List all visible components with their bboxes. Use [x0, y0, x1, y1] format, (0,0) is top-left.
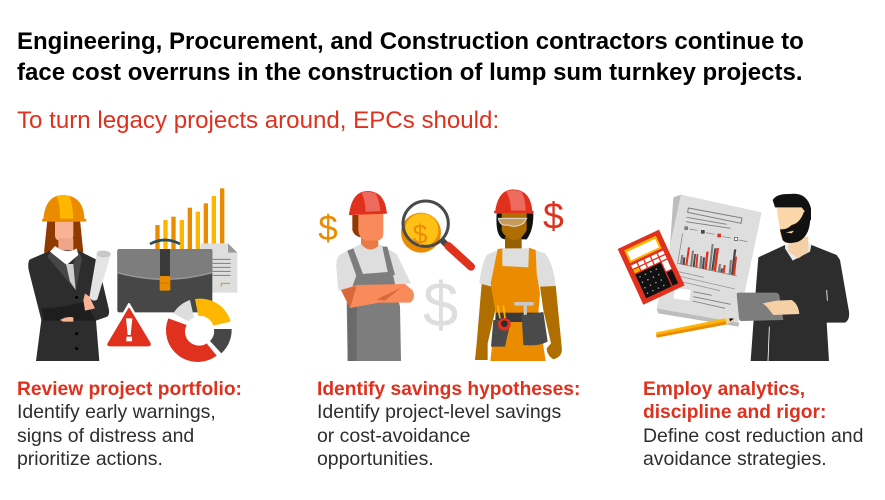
caption: review project portfolio: signs of distress and	[17, 425, 194, 447]
illustration: engineer with briefcase and charts	[28, 188, 238, 362]
caption: identify savings hypotheses: Identify project-level savings	[317, 401, 561, 423]
man with tablet	[737, 194, 849, 361]
worker: man with crossed arms	[336, 191, 414, 361]
icon: warning triangle	[104, 304, 154, 347]
icon: magnifier over coin: $	[413, 219, 428, 249]
calculator	[618, 230, 685, 305]
illustration: workers with coin and dollar signs	[318, 189, 564, 361]
title	[17, 28, 804, 86]
pencil	[656, 318, 737, 338]
caption: review project portfolio: Identify early warnings,	[17, 401, 216, 423]
title: face cost overruns in the construction of lump sum turnkey projects.	[17, 59, 802, 86]
caption: employ analytics: Define cost reduction and	[643, 425, 863, 447]
bar chart	[155, 188, 224, 250]
caption: review project portfolio: prioritize actions.	[17, 448, 163, 470]
caption: identify savings hypotheses: or cost-avoidance	[317, 425, 470, 447]
report document	[657, 195, 762, 327]
caption: employ analytics: discipline and rigor:	[643, 402, 826, 423]
caption: review project portfolio	[17, 379, 242, 470]
document	[201, 243, 237, 293]
briefcase	[117, 240, 212, 312]
bar chart	[678, 233, 737, 276]
title: Engineering, Procurement, and Construction contractors continue to	[17, 28, 804, 55]
caption: employ analytics	[643, 379, 863, 470]
caption: identify savings hypotheses: opportunities.	[317, 448, 434, 470]
caption: identify savings hypotheses	[317, 379, 580, 470]
caption: identify savings hypotheses: Identify savings hypotheses:	[317, 379, 580, 400]
icon: magnifier over coin	[401, 201, 471, 267]
worker: woman in orange apron	[475, 189, 562, 361]
caption: employ analytics: Employ analytics,	[643, 379, 805, 400]
icon: orange dollar: $	[318, 209, 338, 248]
icon: grey dollar: $	[423, 271, 458, 341]
illustration: man with tablet, report and calculator	[618, 194, 850, 361]
caption: review project portfolio: Review project portfolio:	[17, 379, 242, 400]
donut chart	[166, 299, 232, 362]
icon: red dollar: $	[543, 195, 564, 237]
engineer: woman in suit	[28, 195, 111, 361]
subtitle: To turn legacy projects around, EPCs should:	[17, 107, 499, 134]
caption: employ analytics: avoidance strategies.	[643, 448, 827, 470]
